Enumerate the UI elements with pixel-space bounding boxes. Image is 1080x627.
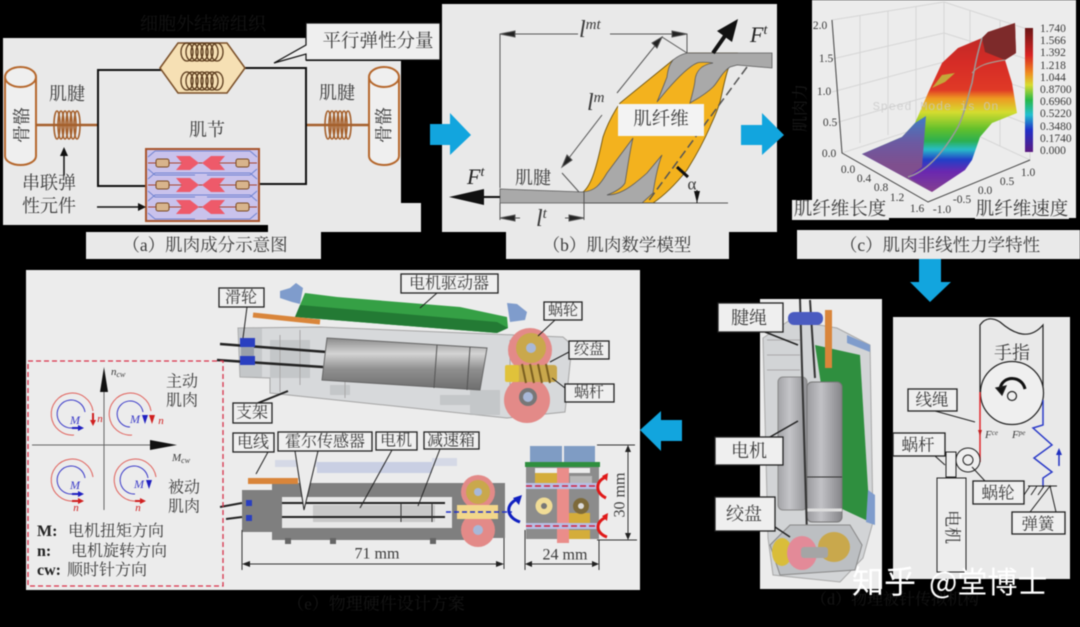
arrow d to e [640, 411, 682, 451]
ground hatch [1024, 486, 1057, 495]
legend text: 电机扭矩方向 [68, 522, 164, 540]
torque glyph Q2: M [69, 413, 81, 427]
panel: muscle composition (a) [3, 14, 440, 259]
axis tick labels: 1.0 [817, 86, 831, 98]
colour bar: 1.740 [1040, 23, 1066, 35]
dimension lt [500, 192, 584, 232]
hidden axis label: 肌肉力 [792, 84, 810, 132]
panel: hardware design (e) [26, 270, 640, 590]
axis tick labels [813, 20, 1035, 216]
bone left: 骨骼 [12, 107, 32, 143]
quadrant text active: 肌肉 [166, 392, 198, 410]
label: motor driver: 电机驱动器 [409, 274, 489, 292]
axis tick labels: 0.0 [822, 148, 836, 160]
colour bar: 0.6960 [1040, 96, 1072, 108]
torque glyph Q1: M [129, 412, 141, 426]
hidden heading: extracellular tissue: 细胞外结缔组织 [140, 14, 267, 34]
label: wire: 电线 [237, 434, 269, 452]
label: pulley [219, 288, 264, 338]
dashed quadrant box [28, 361, 223, 586]
torque glyph Q2: n [97, 413, 103, 425]
caption c: （c）肌肉非线性力学特性 [840, 235, 1041, 255]
finger [980, 319, 1044, 424]
torque glyph Q3 [51, 459, 93, 514]
parallel branch wiring [98, 68, 306, 186]
quadrant axes: cw [116, 370, 126, 379]
torque glyph Q1: n [158, 415, 164, 427]
quadrant axes [32, 366, 191, 510]
label: tendon: 肌腱 [515, 168, 551, 188]
axis tick labels: -0.5 [953, 194, 971, 206]
caption b [506, 232, 729, 259]
dimension lmt: mt [586, 17, 602, 33]
colour bar: 1.392 [1040, 47, 1066, 59]
sarcomere box [146, 149, 259, 221]
dimension lmt [500, 17, 687, 188]
quadrant text passive: 被动 [168, 478, 200, 496]
label: series elastic element: 串联弹 [22, 173, 76, 193]
label: bracket: 支架 [236, 404, 268, 422]
label: spring: 弹簧 [1022, 514, 1056, 534]
axis tick labels: 1.6 [910, 203, 924, 215]
tendon right [306, 83, 369, 139]
quadrant text active [166, 372, 198, 410]
quadrant text passive [168, 478, 200, 516]
dimension 24 mm: 24 mm [543, 546, 588, 564]
colour bar: 0.5220 [1040, 108, 1072, 120]
axis tick labels: 0.5 [1000, 176, 1014, 188]
hidden caption d: （d）物理被针传拟机构 [811, 590, 979, 608]
hidden caption e: （e）物理硬件设计方案 [287, 594, 465, 614]
label: winch: 绞盘 [726, 504, 762, 524]
axis tick labels: 0.0 [841, 164, 855, 176]
torque glyph Q2 [51, 393, 103, 435]
label: winch [715, 497, 790, 537]
panel: 3D winch device (d left) [715, 299, 882, 589]
label: worm wheel [972, 467, 1024, 504]
watermark: @堂博士 [929, 558, 1047, 602]
dimension 30 mm: 30 mm [612, 472, 628, 517]
side view [525, 446, 608, 543]
dimension 30 mm [597, 445, 637, 540]
axis tick labels: 0.8 [874, 182, 888, 194]
arrow c to d [910, 259, 951, 302]
label: motor driver [401, 274, 498, 308]
dimension lt: l [536, 206, 543, 232]
caption c [797, 230, 1080, 259]
force arrow left: F [467, 164, 480, 189]
colour bar: 1.044 [1040, 72, 1066, 84]
force arrow left [449, 164, 500, 205]
label: worm [552, 378, 614, 402]
worm and motor [937, 452, 966, 572]
legend text [37, 522, 167, 579]
caption a: （a）肌肉成分示意图 [122, 235, 288, 255]
chart axes [832, 20, 1030, 202]
worm wheel [956, 448, 980, 472]
axis tick labels: 0.0 [978, 185, 992, 197]
tendon left [36, 84, 98, 139]
tendon right: 肌腱 [319, 83, 355, 103]
label: wire [233, 433, 274, 474]
finger: 手指 [994, 343, 1030, 363]
label: worm: 蜗杆 [902, 436, 934, 454]
blue spring: F [1012, 429, 1019, 441]
quadrant text passive: 肌肉 [168, 498, 200, 516]
legend text: 顺时针方向 [67, 561, 147, 579]
label: spring [1012, 486, 1065, 534]
tendon left: 肌腱 [49, 84, 85, 104]
worm and motor: 电机 [942, 510, 962, 544]
label: motor [360, 432, 417, 508]
faint watermark: Speed Mode is On [873, 100, 999, 114]
blue spring: pe [1018, 429, 1025, 437]
torque glyph Q1 [109, 393, 164, 435]
force arrow left: t [480, 165, 485, 180]
force arrow right: F [750, 22, 763, 47]
label: muscle fibre [618, 104, 704, 136]
label: cord: 线绳 [916, 390, 948, 410]
label: series elastic element: 性元件 [22, 196, 76, 216]
dimension 71 mm: 71 mm [355, 546, 400, 562]
colour bar: 0.3480 [1040, 121, 1072, 133]
axis tick labels: 1.5 [819, 53, 833, 65]
label: gearbox: 减速箱 [427, 432, 475, 450]
colour bar: 0.8700 [1040, 84, 1072, 96]
dimension lm: l [587, 90, 594, 116]
legend text: M: [37, 523, 57, 540]
red tendon force line: F [985, 429, 992, 441]
bone left [5, 67, 36, 165]
arrow a to b [430, 113, 471, 155]
arrows to series elements [60, 147, 146, 211]
muscle fibres yellow [583, 53, 737, 203]
caption b: （b）肌肉数学模型 [543, 235, 691, 255]
callout: parallel elastic component: 平行弹性分量 [322, 31, 434, 52]
dashed pennation line [647, 67, 747, 203]
label: worm: 蜗杆 [574, 384, 604, 401]
colour bar: 0.000 [1040, 145, 1066, 157]
blue spring [1011, 400, 1062, 487]
quadrant axes: cw [181, 456, 191, 465]
bottom device section [220, 458, 522, 547]
label: gearbox [418, 432, 479, 506]
torque glyph Q4: n [135, 502, 141, 514]
label: tendon cord [718, 303, 798, 345]
legend text: cw: [37, 562, 61, 579]
axis tick labels: 1.0 [1021, 167, 1035, 179]
colour bar: 1.566 [1040, 35, 1066, 47]
torque glyph Q4 [114, 459, 156, 514]
tendon and aponeurosis grey [500, 53, 772, 203]
colour bar: 0.1740 [1040, 133, 1072, 145]
dimension 24 mm [525, 530, 599, 570]
label: pulley: 滑轮 [225, 288, 257, 306]
top device assembly [217, 283, 572, 423]
red tendon force line: ce [992, 429, 998, 437]
colour bar [1025, 23, 1072, 157]
label: motor: 电机 [731, 441, 767, 461]
callout: parallel elastic component [274, 23, 440, 63]
label: cord [908, 389, 975, 422]
panel: finger mechanism diagram (d right) [893, 317, 1070, 579]
label: worm gear [538, 302, 582, 336]
axis tick labels: 0.4 [857, 173, 871, 185]
panel: nonlinear mechanics 3D chart (c) [792, 0, 1080, 259]
label: tendon [515, 168, 579, 192]
bone right [369, 67, 399, 165]
dimension 71 mm [242, 530, 504, 570]
quadrant axes: M [172, 452, 181, 464]
axis label: fibre length: 肌纤维长度 [794, 199, 886, 220]
dimension lmt: l [579, 17, 586, 43]
red tendon force line [978, 392, 998, 462]
dimension lt: t [543, 206, 548, 222]
torque glyph Q3: n [73, 502, 79, 514]
label: sarcomere: 肌节 [189, 120, 225, 140]
label: worm [893, 433, 945, 465]
axis tick labels: 0.5 [823, 117, 837, 129]
baseline and angle [584, 167, 728, 203]
label: tendon cord: 腱绳 [731, 308, 767, 328]
caption a [86, 232, 321, 259]
label: motor [715, 421, 798, 465]
axis tick labels: 2.0 [813, 20, 827, 32]
surface [862, 23, 1017, 192]
torque glyph Q3: M [69, 478, 81, 492]
label: hall sensor: 霍尔传感器 [285, 432, 365, 450]
label: bracket [233, 391, 288, 423]
dimension lm [562, 37, 687, 167]
label: hall sensor [278, 432, 372, 510]
legend text: 电机旋转方向 [71, 542, 167, 560]
label: series elastic element [22, 173, 76, 216]
label: worm wheel: 蜗轮 [982, 484, 1014, 502]
baseline and angle: α [688, 174, 697, 194]
label: worm gear: 蜗轮 [548, 302, 578, 319]
quadrant axes: n [111, 366, 116, 378]
label: winch: 绞盘 [574, 341, 604, 358]
parallel elastic element hexagon [160, 43, 245, 93]
force arrow right [713, 19, 768, 53]
force arrow right: t [763, 23, 768, 38]
label: muscle fibre: 肌纤维 [633, 109, 689, 130]
label: motor: 电机 [380, 432, 412, 450]
torque glyph Q4: M [133, 477, 145, 491]
chart grid [832, 2, 1030, 202]
watermark [852, 557, 1047, 603]
colour bar: 1.218 [1040, 60, 1066, 72]
bone right: 骨骼 [374, 107, 394, 143]
label: winch [550, 341, 609, 362]
axis label: fibre velocity: 肌纤维速度 [976, 199, 1068, 220]
panel: muscle math model (b) [442, 4, 777, 259]
quadrant text active: 主动 [166, 372, 198, 390]
arrow b to c [741, 113, 784, 155]
dimension lm: m [594, 90, 605, 106]
watermark: 知乎 [852, 557, 916, 603]
legend text: n: [37, 543, 51, 560]
axis tick labels: 1.2 [890, 192, 904, 204]
axis tick labels: -1.0 [933, 204, 951, 216]
